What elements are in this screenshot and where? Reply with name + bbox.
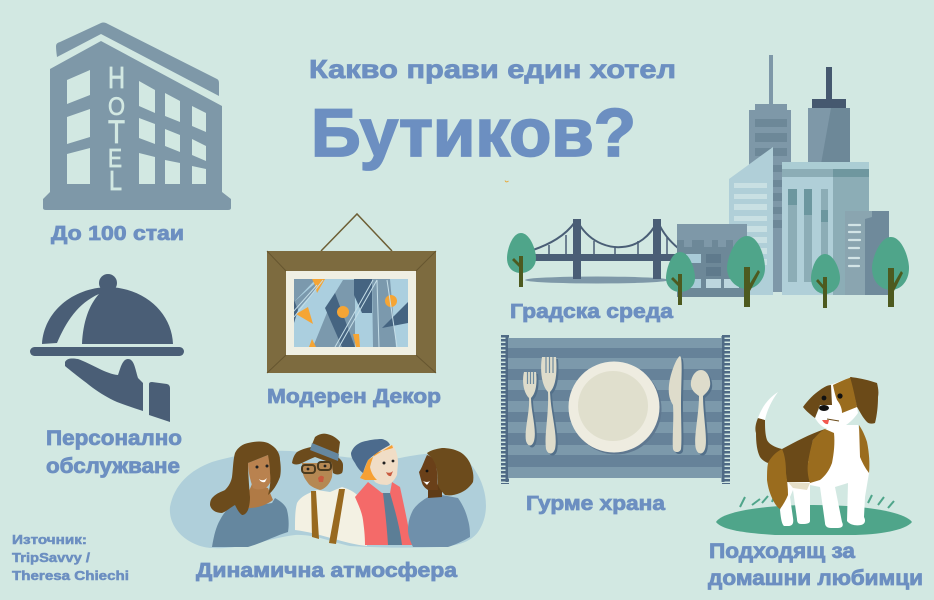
centre building (782, 162, 869, 295)
source credit: Theresa Chiechi (12, 569, 129, 583)
label: gourmet food: Гурме храна (526, 493, 666, 515)
icon: hotel building: O (108, 93, 125, 121)
icon: hotel building: E (108, 143, 122, 173)
label: pet friendly: домашни любимци (708, 567, 923, 590)
plate (568, 362, 662, 454)
person 3 (351, 439, 412, 545)
large fork (541, 357, 556, 454)
tail (755, 392, 782, 463)
trees (507, 233, 909, 308)
person 1 (210, 442, 289, 547)
source credit: Източник: (12, 533, 87, 547)
white body and legs (780, 425, 869, 528)
label: urban setting: Градска среда (510, 301, 674, 323)
title line: question: Какво прави един хотел (309, 54, 676, 84)
illustration: table setting (505, 335, 726, 484)
label: personal service: Персонално (46, 427, 182, 450)
small left building (677, 224, 747, 297)
illustration: beagle dog on grass (716, 377, 912, 535)
source credit: TripSavvy / (12, 551, 91, 565)
bridge (525, 219, 678, 284)
icon: cloche and serving hand (30, 274, 184, 422)
icon: hotel building: T (108, 114, 125, 150)
belly shade (788, 482, 810, 490)
chest side stripe (859, 425, 869, 473)
label: pet friendly (708, 540, 923, 590)
grass (716, 494, 912, 535)
label: rooms: До 100 стаи (51, 223, 184, 245)
spoon (691, 370, 710, 454)
head (803, 377, 878, 428)
small orange speck (505, 180, 508, 182)
illustration: framed modern art (267, 214, 436, 373)
label: personal service (46, 427, 182, 478)
right building (845, 211, 889, 295)
label: modern decor: Модерен Декор (267, 386, 441, 408)
title: main word: Бутиков? (311, 95, 636, 171)
icon: hotel building (43, 22, 231, 210)
source credit (12, 533, 129, 583)
tower B (808, 67, 850, 164)
brown saddle (782, 429, 825, 482)
icon: hotel building: H (108, 60, 125, 95)
label: dynamic atmosphere: Динамична атмосфера (196, 560, 458, 582)
illustration: group of people (170, 434, 486, 548)
person 2 (292, 434, 367, 546)
light building (729, 147, 773, 295)
illustration: city skyline with bridge (507, 55, 909, 308)
hind leg (767, 449, 788, 509)
icon: hotel building: L (109, 165, 122, 196)
small fork (523, 372, 536, 446)
placemat (505, 335, 726, 484)
label: personal service: обслужване (46, 455, 180, 478)
tower A (749, 55, 791, 292)
knife (669, 356, 682, 452)
label: pet friendly: Подходящ за (709, 540, 855, 563)
person 4 (408, 448, 473, 547)
